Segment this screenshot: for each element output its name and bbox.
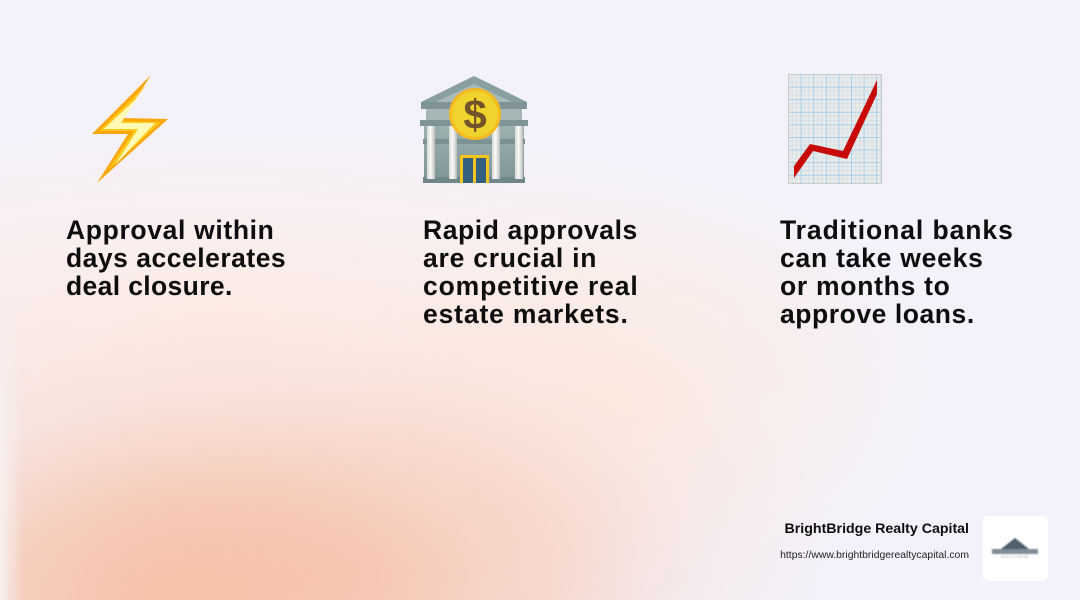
text block: rapid approvals [423,215,639,329]
logo mark [991,537,1039,559]
text block: rapid approvals: are crucial in [423,243,597,273]
background gradient [0,187,854,600]
logo card [983,516,1048,581]
text block: approval within days [66,215,286,301]
text block: rapid approvals: competitive real [423,271,639,301]
text block: rapid approvals: estate markets. [423,299,629,329]
text block: traditional banks: or months to [780,271,951,301]
text block: rapid approvals: Rapid approvals [423,215,638,245]
text block: traditional banks [780,215,1014,329]
text block: approval within days: Approval within [66,215,274,245]
text block: approval within days: deal closure. [66,271,233,301]
company name: BrightBridge Realty Capital [785,521,969,537]
text block: traditional banks: Traditional banks [780,215,1014,245]
text block: approval within days: days accelerates [66,243,286,273]
icon: bank building with dollar coin: $ [463,91,487,138]
text block: traditional banks: can take weeks [780,243,984,273]
company website url: https://www.brightbridgerealtycapital.com [780,550,969,561]
text block: traditional banks: approve loans. [780,299,975,329]
logo mark: REALTY CAPITAL [1001,555,1029,559]
